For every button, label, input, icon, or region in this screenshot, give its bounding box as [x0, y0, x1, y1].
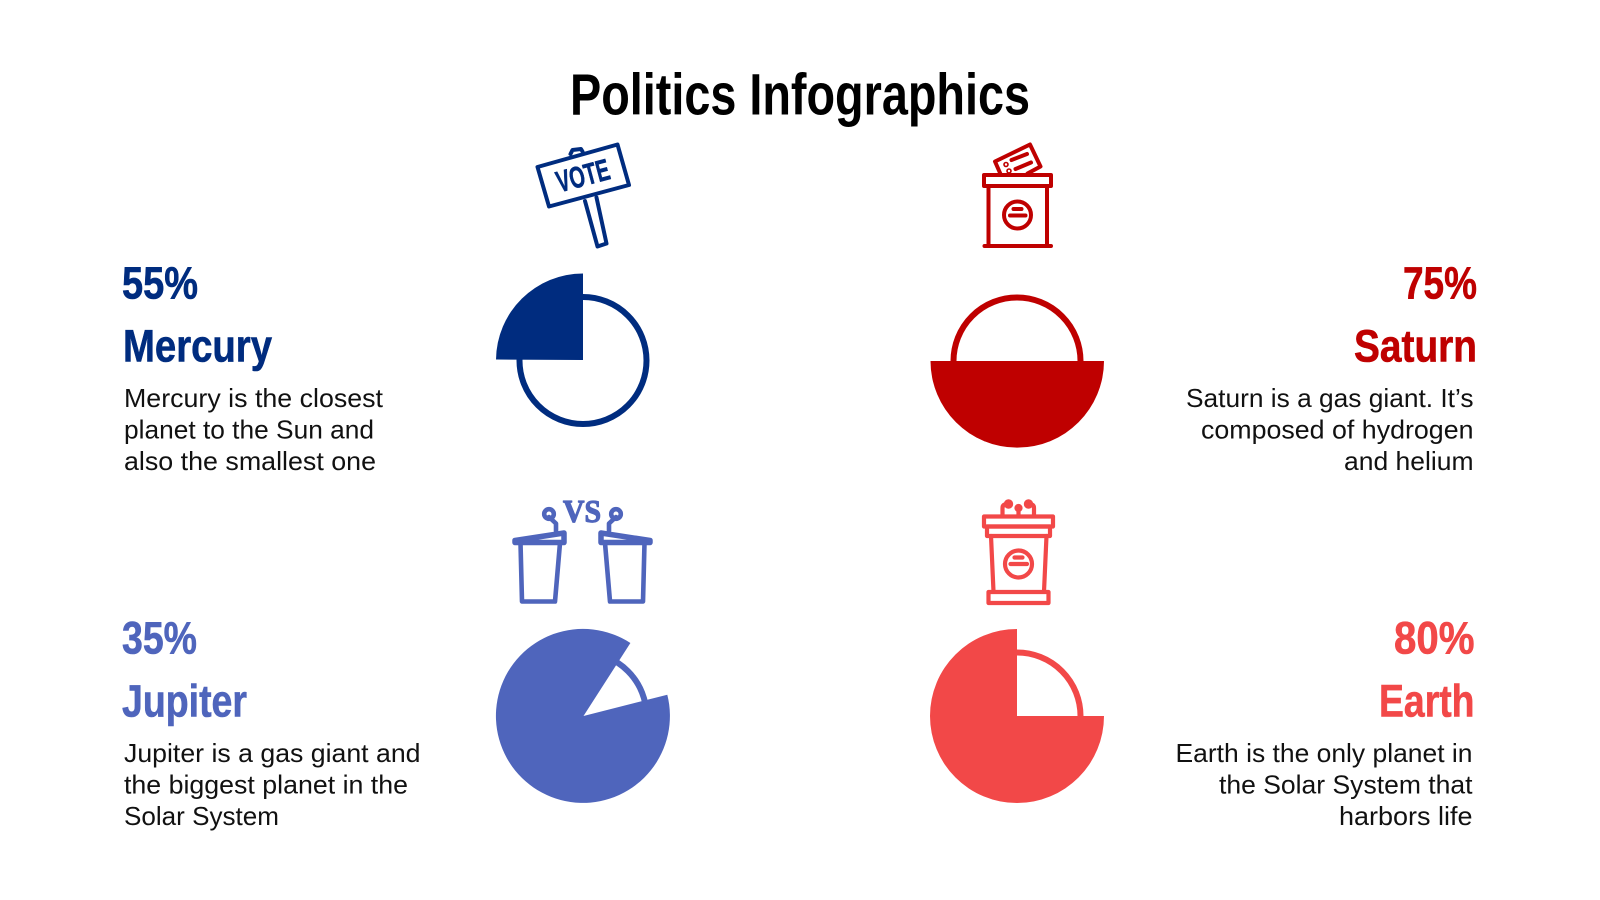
Saturn description: and helium [1344, 446, 1474, 476]
Jupiter description: Solar System [124, 801, 279, 831]
panel: Jupiter [122, 493, 670, 831]
icon: ballot box [984, 144, 1051, 246]
Saturn description: composed of hydrogen [1201, 414, 1474, 444]
Jupiter description [124, 738, 421, 831]
Jupiter description: the biggest planet in the [124, 770, 408, 800]
icon: lectern [984, 501, 1053, 603]
Saturn description: Saturn is a gas giant. It’s [1186, 383, 1474, 413]
icon: debate podiums with VS: VS [563, 493, 601, 529]
Jupiter description: Jupiter is a gas giant and [124, 738, 421, 768]
icon: vote sign: VOTE [553, 153, 613, 199]
Saturn percentage: 75% [1403, 258, 1477, 308]
panel: Earth [930, 501, 1474, 831]
panel: Saturn [930, 144, 1477, 476]
Mercury description: also the smallest one [124, 446, 376, 476]
Mercury description: Mercury is the closest [124, 383, 384, 413]
title: Politics Infographics [570, 62, 1030, 128]
Earth description [1176, 738, 1473, 831]
Saturn heading: Saturn [1354, 320, 1477, 372]
Earth description: Earth is the only planet in [1176, 738, 1472, 768]
panel: Mercury [122, 144, 646, 476]
Earth description: the Solar System that [1219, 770, 1473, 800]
Mercury description [124, 383, 384, 476]
Earth description: harbors life [1339, 801, 1472, 831]
Saturn description [1186, 383, 1474, 476]
pie: Mercury 55% [496, 274, 646, 424]
Earth heading: Earth [1379, 676, 1474, 726]
Jupiter percentage: 35% [122, 612, 197, 664]
pie: Jupiter 35% [496, 629, 670, 803]
Jupiter heading: Jupiter [122, 676, 247, 726]
Mercury heading: Mercury [123, 320, 272, 372]
icon: debate podiums with VS [515, 493, 650, 602]
pie: Saturn 75% [930, 298, 1104, 448]
Mercury description: planet to the Sun and [124, 414, 374, 444]
icon: vote sign [538, 144, 629, 246]
pie: Earth 80% [930, 629, 1104, 803]
Earth percentage: 80% [1394, 612, 1474, 664]
Mercury percentage: 55% [122, 258, 198, 308]
